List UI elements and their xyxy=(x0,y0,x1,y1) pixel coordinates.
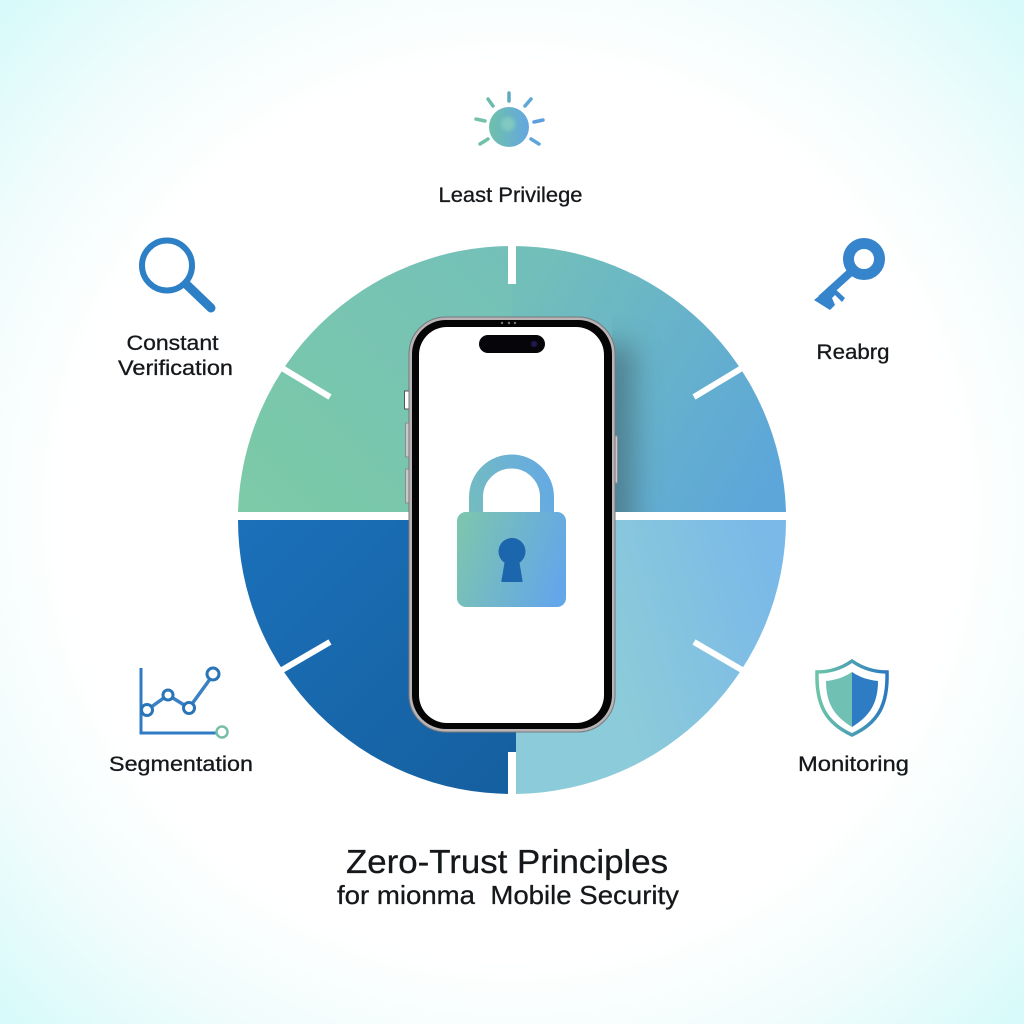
principle: constant verification xyxy=(118,240,233,380)
icon: shield xyxy=(817,661,887,735)
label: Constant xyxy=(126,332,219,355)
speaker dots xyxy=(501,322,516,324)
side buttons xyxy=(404,391,618,503)
label: Reabrg xyxy=(816,341,890,364)
phone shadow xyxy=(612,332,649,512)
principle: segmentation xyxy=(109,668,253,776)
title xyxy=(337,843,679,910)
principle: monitoring xyxy=(798,661,909,776)
icon: line chart xyxy=(141,668,228,738)
phone screen xyxy=(419,327,604,723)
panel: central segmented circle xyxy=(238,244,786,796)
label: Monitoring xyxy=(798,753,909,776)
icon: padlock xyxy=(457,462,566,607)
label: Least Privilege xyxy=(438,184,582,207)
principle: least privilege xyxy=(438,93,582,207)
segment: top right xyxy=(512,246,786,512)
subtitle: for mionma Mobile Security xyxy=(337,880,679,910)
title: Zero-Trust Principles xyxy=(346,843,668,880)
principle: reabrg xyxy=(814,244,890,364)
principle: constant verification: Verification xyxy=(118,357,233,380)
segment: top left xyxy=(238,246,512,512)
icon: magnifying glass xyxy=(142,240,211,308)
segment: bottom right xyxy=(516,520,786,794)
icon: sun xyxy=(476,93,543,147)
camera island xyxy=(479,335,545,353)
icon: key xyxy=(814,244,880,310)
phone xyxy=(404,317,618,732)
label: Segmentation xyxy=(109,753,253,776)
segment: bottom left xyxy=(238,520,516,794)
phone frame xyxy=(409,317,615,732)
tick marks xyxy=(238,244,786,796)
